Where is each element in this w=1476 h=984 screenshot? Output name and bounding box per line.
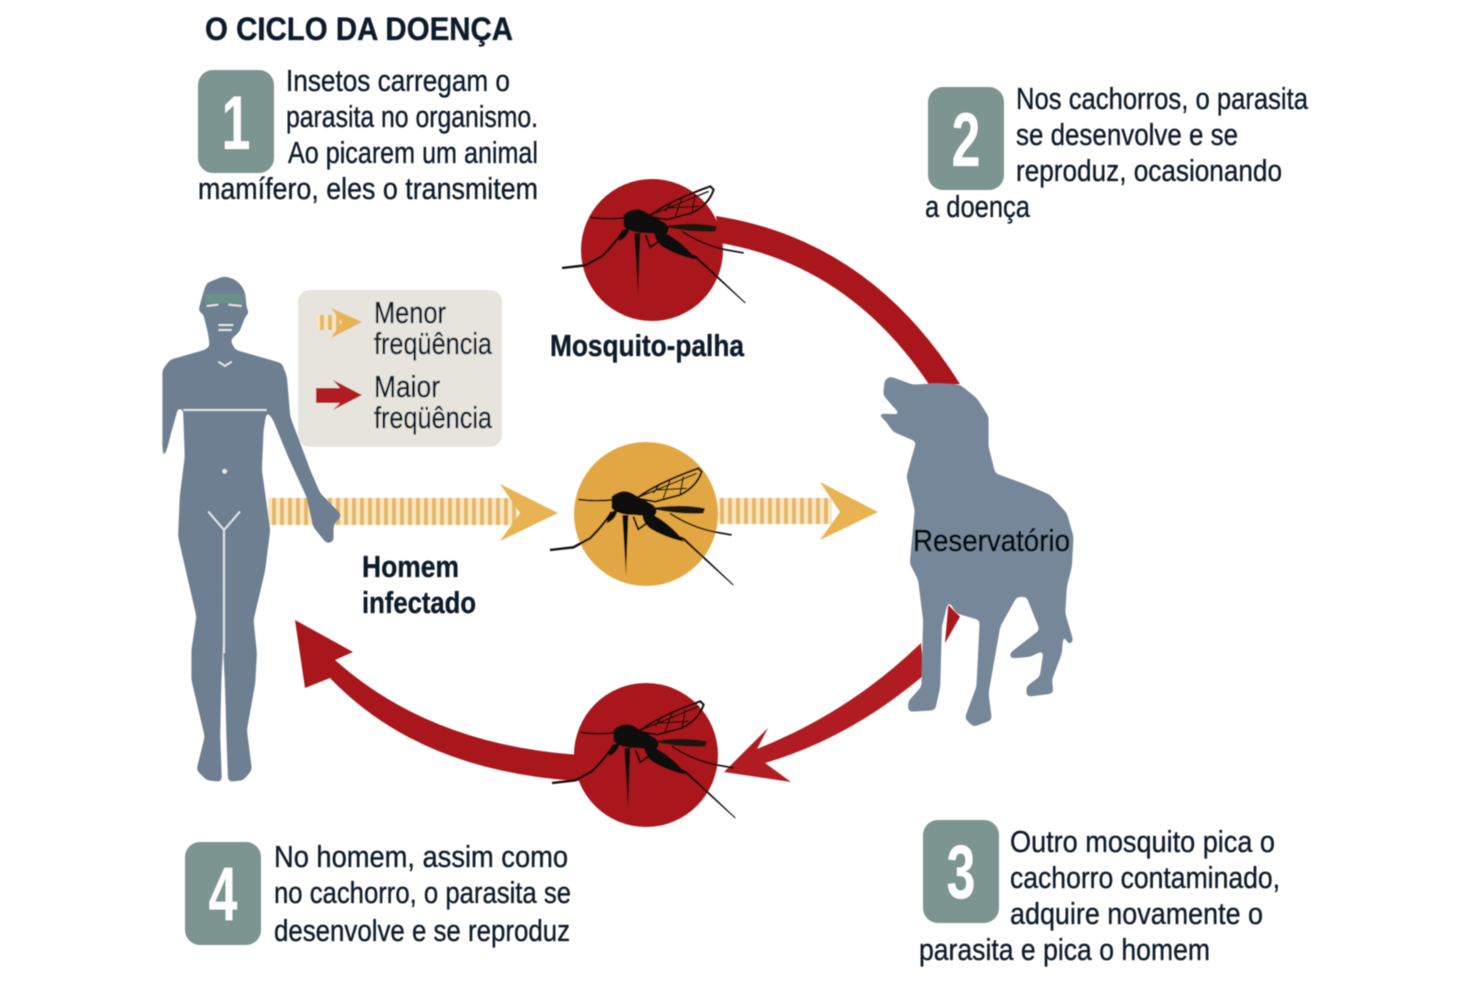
- step 4 text: desenvolve e se reproduz: [274, 913, 570, 948]
- arrow: dog to mosquito: [724, 643, 924, 782]
- step 3 number badge: 3: [947, 829, 975, 914]
- red circle with mosquito (bottom): [552, 683, 735, 827]
- step 4 text: No homem, assim como: [274, 839, 568, 874]
- step 2 text: se desenvolve e se: [1016, 117, 1238, 152]
- step 1 text: [198, 63, 538, 206]
- arrow: mosquito to human: [295, 620, 580, 781]
- step 3 number badge: [923, 820, 999, 923]
- step 4 number badge: [185, 842, 261, 945]
- step 2 number badge: [928, 87, 1004, 190]
- step 3 text: [919, 824, 1280, 967]
- arrow: mosquito to dog: [716, 216, 960, 386]
- arrow: human to mosquito (lower frequency): [268, 484, 558, 541]
- label: reservoir: Reservatório: [913, 523, 1070, 558]
- step 4 text: no cachorro, o parasita se: [274, 875, 571, 910]
- label: infected human: Homem: [362, 549, 459, 584]
- step 3 text: Outro mosquito pica o: [1010, 824, 1275, 859]
- step 1 text: Insetos carregam o: [286, 63, 510, 98]
- step 2 number badge: 2: [952, 97, 980, 182]
- legend: higher frequency label: Maior: [374, 369, 440, 404]
- step 2 text: a doença: [925, 189, 1031, 224]
- arrow: mosquito to reservoir (lower frequency): [718, 482, 878, 540]
- step 2 text: [925, 81, 1309, 224]
- label: infected human: infectado: [362, 585, 476, 620]
- legend: lower frequency label: [374, 295, 493, 361]
- step 2 text: reproduz, ocasionando: [1016, 153, 1282, 188]
- title: O CICLO DA DOENÇA: [205, 11, 513, 47]
- step 4 number badge: 4: [209, 851, 237, 936]
- label: sand fly: Mosquito-palha: [550, 328, 745, 363]
- legend panel: [298, 290, 502, 447]
- label: infected human: [362, 549, 476, 620]
- step 4 text: [274, 839, 571, 948]
- step 1 text: mamífero, eles o transmitem: [198, 171, 538, 206]
- legend: higher frequency label: [374, 369, 493, 435]
- legend: lower frequency arrow: [316, 308, 362, 338]
- legend: higher frequency label: freqüência: [374, 400, 493, 435]
- legend: lower frequency label: Menor: [374, 295, 446, 330]
- step 3 text: parasita e pica o homem: [919, 932, 1210, 967]
- step 2: [925, 81, 1309, 224]
- human silhouette: [163, 277, 342, 782]
- step 2 text: Nos cachorros, o parasita: [1016, 81, 1309, 116]
- step 1 number badge: 1: [222, 80, 250, 165]
- step 1 number badge: [198, 70, 274, 173]
- step 3 text: adquire novamente o: [1010, 896, 1263, 931]
- orange circle with mosquito (center): [550, 442, 733, 586]
- red circle with mosquito (sand fly, top): [562, 179, 745, 321]
- legend: lower frequency label: freqüência: [374, 326, 493, 361]
- step 4: [185, 839, 571, 948]
- step 3 text: cachorro contaminado,: [1010, 860, 1280, 895]
- step 1 text: Ao picarem um animal: [288, 135, 538, 170]
- step 1 text: parasita no organismo.: [286, 99, 538, 134]
- legend: higher frequency arrow: [316, 380, 362, 410]
- step 3: [919, 820, 1280, 967]
- step 1: [198, 63, 538, 206]
- dog silhouette: [877, 377, 1073, 727]
